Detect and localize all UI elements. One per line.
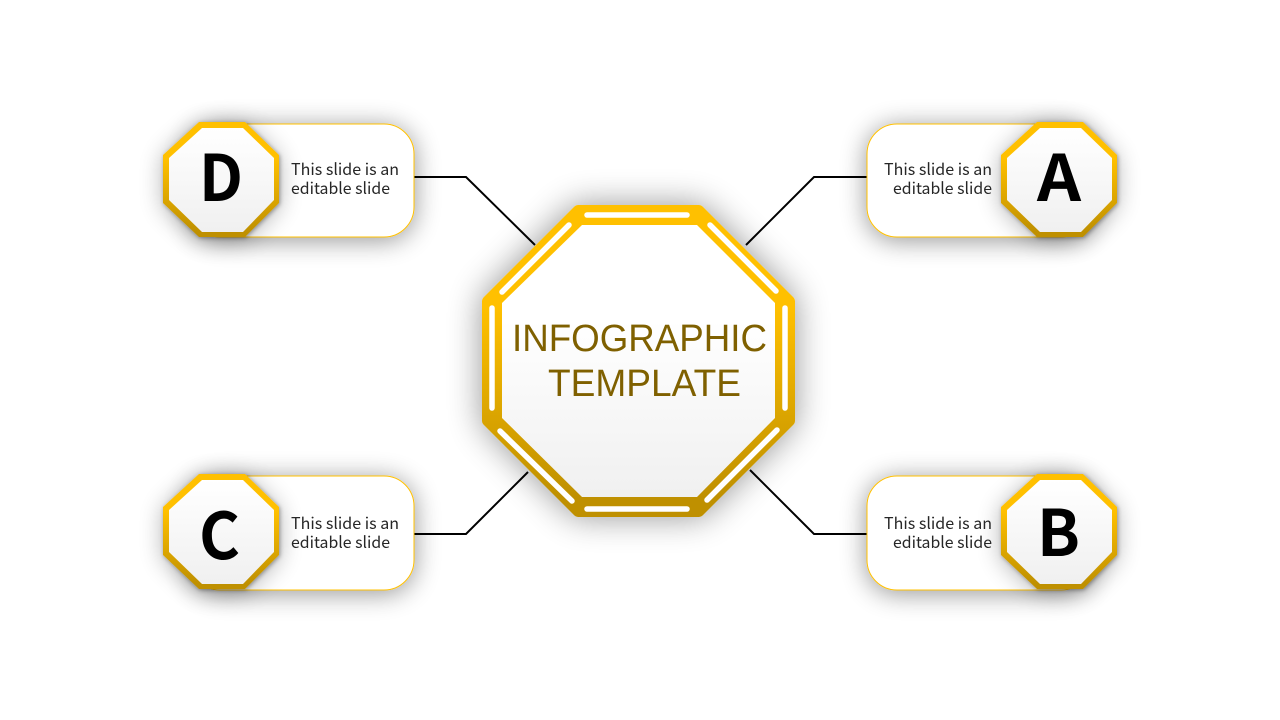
central title: INFOGRAPHIC xyxy=(512,318,767,360)
text C xyxy=(291,510,399,553)
letter C: C xyxy=(199,486,240,578)
item A xyxy=(867,122,1117,237)
text C: This slide is an xyxy=(291,510,399,534)
octagon inner face xyxy=(502,225,775,497)
octagon badge D xyxy=(163,122,279,237)
text B: This slide is an xyxy=(884,510,992,534)
octagon badge C xyxy=(163,474,279,589)
card B xyxy=(867,476,1091,590)
connector: B to centre xyxy=(750,470,867,534)
text C: editable slide xyxy=(291,529,390,553)
text A xyxy=(884,156,992,199)
letter B: B xyxy=(1037,483,1080,575)
central title xyxy=(512,318,767,405)
text B: editable slide xyxy=(893,529,992,553)
connector: C to centre xyxy=(414,472,528,534)
card A xyxy=(867,124,1091,237)
connector: A to centre xyxy=(746,177,867,245)
item C xyxy=(163,474,414,590)
card C xyxy=(190,476,414,590)
text D: This slide is an xyxy=(291,156,399,180)
letter D: D xyxy=(199,128,243,220)
octagon badge B xyxy=(1001,474,1117,589)
item B xyxy=(867,474,1117,590)
letter A: A xyxy=(1036,128,1082,220)
text B xyxy=(884,510,992,553)
connector lines xyxy=(414,177,867,534)
text D: editable slide xyxy=(291,175,390,199)
text A: editable slide xyxy=(893,175,992,199)
item D xyxy=(163,122,414,237)
octagon frame xyxy=(487,210,790,512)
central title: TEMPLATE xyxy=(548,363,741,405)
card D xyxy=(190,124,414,237)
text A: This slide is an xyxy=(884,156,992,180)
text D xyxy=(291,156,399,199)
connector: D to centre xyxy=(414,177,535,245)
white slits around frame xyxy=(492,215,785,509)
octagon badge A xyxy=(1001,122,1117,237)
central octagon xyxy=(487,210,790,512)
